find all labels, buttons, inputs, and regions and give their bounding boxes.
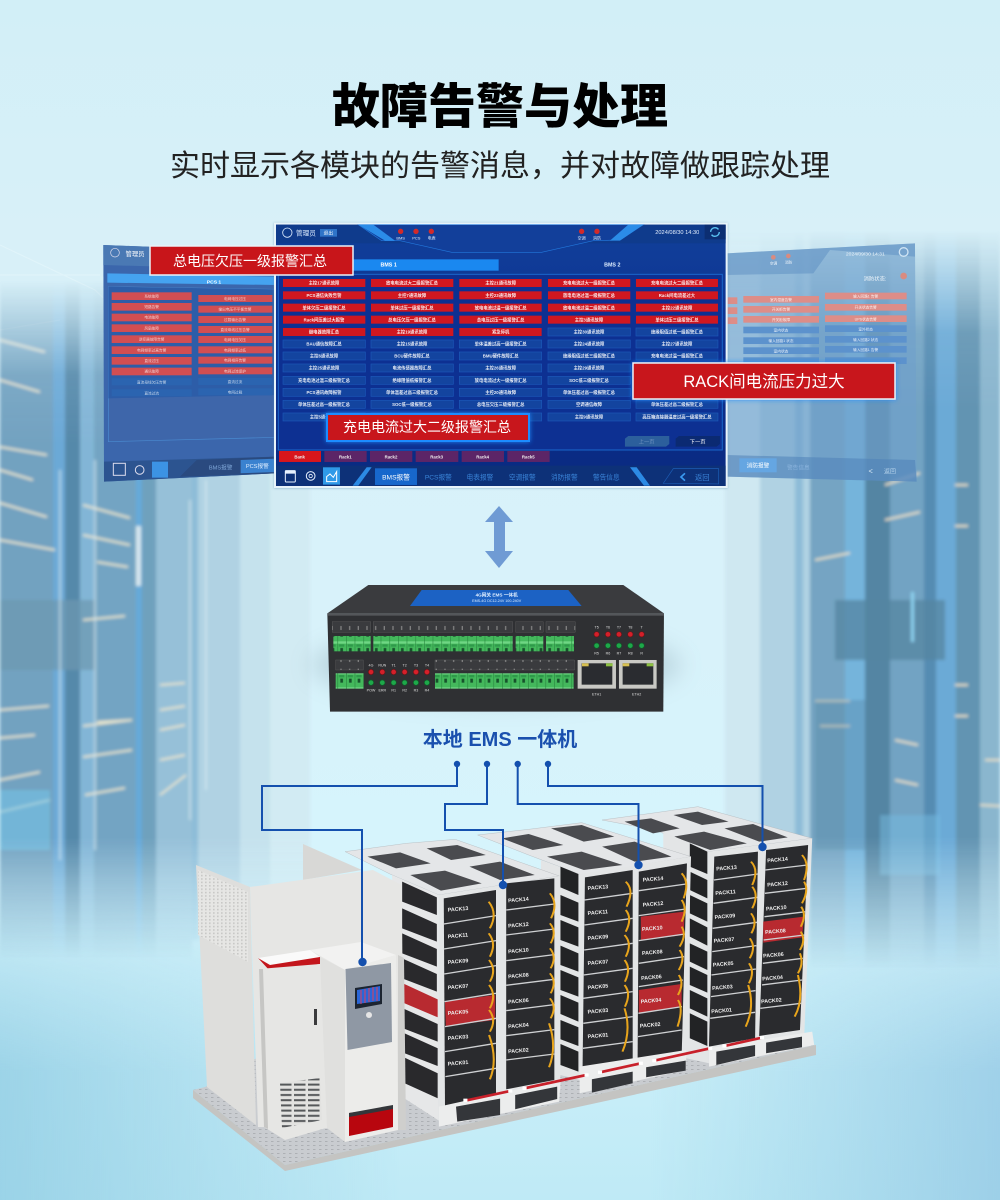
LED indicators: ERR [378,689,387,693]
rack group middle: PACK04 [640,998,662,1005]
panel: fire alarm screen (right, faded): 输入回路1 状态 [768,338,794,343]
alarm list cells: 充电电池过温一级报警汇总 [651,353,704,360]
alarm list cells: 单体压差过高一级报警汇总 [563,389,616,396]
rack group rear right: PACK03 [712,984,733,992]
alarm list cells: 总电压过压一级报警汇总 [477,316,525,323]
panel: PCS alarm screen (left, faded): 电网频率过低 [224,347,246,352]
LED indicators: T3 [414,663,418,667]
alarm list cells: 紧急停机 [492,329,510,336]
alarm list cells: BCU硬件故障汇总 [394,353,430,360]
rack group rear right: PACK13 [716,865,737,873]
panel: PCS alarm screen (left, faded): PCS报警 [246,462,269,470]
LED indicators: T [641,625,644,629]
panel: fire alarm screen (right, faded): 空调 [770,260,778,265]
panel: fire alarm screen (right, faded): 消防状态: [864,274,886,282]
rack group middle: PACK13 [587,884,609,892]
alarm list cells: 充电电流过大一级报警汇总 [563,280,616,287]
rear wall panels [196,844,404,1130]
cabinet: control unit with touch screen [310,942,406,1142]
LED indicators: T8 [628,625,632,629]
alarm list cells: 单体温差过高三级报警汇总 [386,389,439,396]
Ethernet ports [578,660,657,696]
alarm list cells: 单体过压三级报警汇总 [655,316,699,323]
alarm list cells: PCS通讯故障报警 [307,389,342,396]
rack group rear right: PACK04 [762,975,783,983]
panel: fire alarm screen (right, faded): 室内状态 [774,328,789,333]
base plate [193,1000,816,1171]
callout: rack current pressure too high [633,363,895,399]
alarm list cells: 主控30通讯故障 [574,329,605,336]
bottom navigation: 消防报警 [551,473,578,482]
alarm list cells: 主控29通讯故障 [574,365,605,372]
LED indicators: R [640,651,643,655]
alarm list cells: 主控15通讯故障 [397,341,428,348]
panel: PCS alarm screen (left, faded): 直流过流 [144,390,159,395]
panel: PCS alarm screen (left, faded): 短路告警 [144,304,159,309]
alarm list cells: 放电电池过温一级报警汇总 [563,292,616,299]
rack group front: PACK04 [508,1023,529,1030]
bottom navigation: BMS报警 [382,473,410,482]
rack group front: PACK13 [448,906,469,914]
screen header: BMS [396,235,405,240]
alarm list cells: 放电电流过大二级报警汇总 [386,280,439,287]
Ethernet ports: ETH1 [592,692,601,696]
alarm list cells: 放电电池过温一级报警汇总 [475,304,527,311]
callout: total voltage undervoltage: 总电压欠压一级报警汇总 [173,253,327,269]
Ethernet ports: ETH2 [632,692,641,696]
rack group rear right: PACK02 [761,998,782,1005]
rack group middle: PACK11 [587,909,608,917]
alarm list cells: 总电压欠压一级报警汇总 [388,316,436,323]
panel: PCS alarm screen (left, faded): 系统故障 [144,293,159,298]
rack group front: PACK01 [448,1060,469,1068]
device top label [410,590,582,606]
LED indicators: T4 [425,663,429,667]
rack tabs: Bank [294,454,306,459]
alarm list cells: 主控9通讯故障 [575,414,604,421]
rack tabs: Rack5 [522,454,535,459]
alarm list cells: 充电电池过温三级报警汇总 [298,377,351,384]
LED indicators: R1 [391,689,396,693]
screen header: 退出 [324,230,333,237]
device shadow [311,627,681,703]
alarm list cells: 充电电流过大二级报警汇总 [651,280,704,287]
alarm list cells: BMU硬件故障汇总 [483,353,519,360]
alarm list cells: 绝缘阻值低报警汇总 [393,377,432,384]
panel: fire alarm screen (right, faded): 返回 [884,468,896,475]
rack tabs: Rack4 [476,454,490,459]
alarm list cells: 主控21通讯故障 [485,280,517,287]
alarm list cells: SOC低一级报警汇总 [392,401,432,408]
panel: PCS alarm screen (left, faded): 电网过载 [228,389,243,394]
panel: PCS alarm screen (left, faded) [103,245,277,482]
LED indicators: T7 [617,625,621,629]
connection lines [262,761,767,966]
panel: PCS alarm screen (left, faded): 电网相序告警 [224,358,246,363]
scene: battery racks [345,807,814,1127]
panel: fire alarm screen (right, faded): 输入回路2 状态 [853,337,878,342]
rack group rear right: PACK10 [766,905,787,913]
LED indicators: T6 [606,625,610,629]
panel: BMS alarm screen (main) [274,223,728,488]
screen header: 2024/08/30 14:30 [655,230,699,236]
screen header: 电表 [428,234,436,240]
rack group rear right: PACK11 [715,889,736,897]
alarm list cells: 空调通信故障 [576,401,603,408]
rack group front: PACK02 [508,1048,529,1055]
alarm list cells: 高压箱连接器温度过高一级报警汇总 [642,414,712,421]
panel: PCS alarm screen (left, faded): 电网过流保护 [224,368,246,373]
alarm list cells: 主控24通讯故障 [574,341,605,348]
callout: total voltage undervoltage [150,246,353,275]
panel: fire alarm screen (right, faded): 输入回路1 告警 [853,347,878,352]
rack group rear right: PACK05 [713,961,734,969]
LED indicators: T5 [594,625,599,629]
panel: PCS alarm screen (left, faded): 逆变器故障告警 [139,336,165,341]
alarm list cells: 主控19通讯故障 [397,329,428,336]
BMS tabs: BMS 2 [604,263,620,269]
panel: fire alarm screen (right, faded): 消防 [785,259,793,264]
rack group front: PACK10 [508,948,529,955]
rack group front: PACK14 [508,897,529,904]
rack tabs: Rack3 [430,454,444,459]
panel: PCS alarm screen (left, faded): 直流过流 [228,379,243,384]
rack group rear right: PACK07 [714,937,735,945]
LED indicators: T1 [392,663,396,667]
rack group middle: PACK02 [640,1022,661,1030]
rack tabs: Rack2 [385,454,398,459]
device name label: 本地 EMS 一体机 [423,728,577,751]
alarm list cells: 单体温差过高一级报警汇总 [475,341,527,348]
alarm list cells: SOC低三级报警汇总 [569,377,609,384]
panel: fire alarm screen (right, faded): 开关状态告警 [855,305,877,310]
bottom navigation: 警告信息 [593,473,620,482]
rack group front: PACK11 [448,933,468,940]
panel: fire alarm screen (right, faded): 消防报警 [747,461,770,469]
pagination buttons [625,436,720,447]
panel: PCS alarm screen (left, faded): 过载输出告警 [224,317,246,322]
rack group rear right: PACK12 [767,881,788,889]
panel: fire alarm screen (right, faded): 警告信息 [787,463,810,471]
bottom navigation: PCS报警 [425,473,452,482]
LED indicators: R2 [402,689,407,693]
rack group rear right: PACK01 [711,1008,732,1015]
panel: fire alarm screen (right, faded): < [869,466,873,475]
rack group front: PACK05 [448,1009,469,1017]
screen header [276,225,726,252]
terminal blocks [333,636,574,689]
alarm list cells: Rack间电流差过大 [659,292,696,299]
LED indicators: T2 [403,663,407,667]
alarm list cells: 单体压差过高二级报警汇总 [651,401,704,408]
panel: fire alarm screen (right, faded): 开关柜故障 [772,317,790,322]
panel: PCS alarm screen (left, faded): 直流过压 [144,358,159,363]
rack group middle: PACK09 [587,934,609,942]
alarm list cells: 继电器故障汇总 [309,329,340,336]
alarm list cells: 主控6通讯故障 [310,353,339,360]
rack group middle: PACK12 [643,901,664,909]
LED indicators: RUN [378,663,387,667]
alarm list cells: 主控25通讯故障 [309,365,340,372]
pagination buttons: 上一页 [639,437,655,445]
callout: rack current pressure too high: RACK间电流压力过大 [683,372,845,391]
alarm list cells: 主控26通讯故障 [485,365,517,372]
panel: fire alarm screen (right, faded): 开关柜告警 [772,307,790,312]
panel: PCS alarm screen (left, faded): 风扇故障 [144,325,159,330]
panel: PCS alarm screen (left, faded): PCS 1 [207,279,221,285]
alarm list cells: 单体欠压二级报警汇总 [302,304,346,311]
rack group rear right: PACK06 [763,952,784,960]
rack tabs: Rack1 [339,454,352,459]
alarm list cells: 放电电流过大一级报警汇总 [475,377,527,384]
LED indicators: R5 [594,651,599,655]
screen header: 空调 [578,234,586,240]
busbars [463,1036,764,1102]
LED indicators: R7 [617,651,621,655]
rack group rear right: PACK14 [767,857,788,864]
panel: fire alarm screen (right, faded): 输入回路1 告警 [853,294,878,299]
panel: PCS alarm screen (left, faded): 电网频率过高告警 [137,347,167,352]
alarm list cells: 主控17通讯故障 [309,280,340,287]
rack group middle: PACK14 [643,876,664,884]
rack group front: PACK09 [448,958,469,966]
panel: PCS alarm screen (left, faded): 管理员 [126,249,144,258]
panel: PCS alarm screen (left, faded): 电网电压过压 [224,296,246,301]
callout: charge current too high [327,414,529,441]
rack group rear right [602,807,814,1067]
alarm list cells: BAU通信故障汇总 [306,341,342,348]
screen header: PCS [412,235,421,240]
alarm list cells: 主控5通讯故障 [310,414,339,421]
alarm list cells: 主控7通讯故障 [398,292,427,299]
LED indicators: R8 [628,651,633,655]
alarm list cells: 绝缘阻值过低一级报警汇总 [651,329,704,336]
pagination buttons: 下一页 [690,438,706,445]
screen header: 消防 [593,234,601,240]
panel: PCS alarm screen (left, faded): 电池故障 [144,315,159,320]
LED indicators: R3 [414,689,418,693]
LED indicators: 4G [369,663,374,667]
alarm list cells: 主控27通讯故障 [662,341,693,348]
rack group front: PACK03 [448,1034,469,1042]
alarm list cells: 单体压差过高一级报警汇总 [298,401,351,408]
alarm list cells: 主控20通讯故障 [485,389,517,396]
cabinet: left with red band [258,950,326,1140]
rack group middle: PACK08 [642,949,663,957]
title: 故障告警与处理 [332,81,668,134]
panel: fire alarm screen (right, faded) [727,243,917,482]
bottom navigation: 电表报警 [467,473,494,482]
device: local EMS unit [327,585,664,712]
rack group middle: PACK07 [587,959,609,967]
panel: fire alarm screen (right, faded): 室外状态 [858,326,873,331]
panel: PCS alarm screen (left, faded): 电网电压欠压 [224,337,246,342]
rack group rear right: PACK08 [765,928,786,936]
bottom navigation [276,466,726,486]
alarm list cells: 单体过压一级报警汇总 [390,304,434,311]
rack group middle: PACK06 [641,974,662,982]
LED indicators: R6 [606,651,610,655]
rack group middle: PACK10 [642,925,663,933]
alarm list cells [283,279,718,421]
callout: charge current too high: 充电电流过大二级报警汇总 [343,419,511,435]
alarm list cells: Rack间压差过大报警 [304,316,345,323]
panel: PCS alarm screen (left, faded): BMS报警 [209,463,233,471]
arrow: bidirectional [485,506,513,568]
rack group middle: PACK05 [587,984,609,991]
rack group front: PACK07 [448,984,469,991]
bottom navigation: 返回 [695,473,710,482]
BMS tabs: BMS 1 [381,263,397,269]
panel: PCS alarm screen (left, faded): 输出电压不平衡告警 [219,307,252,312]
rack group front: PACK06 [508,998,529,1006]
alarm list cells: 放电电池过温二级报警汇总 [563,304,616,311]
rack group rear right: PACK09 [714,913,735,921]
BMS tabs [352,259,620,271]
rack tabs [279,451,550,462]
alarm list cells: 主控22通讯故障 [662,304,693,311]
panel: fire alarm screen (right, faded): 2024/09/30 14:31 [846,251,885,257]
panel: fire alarm screen (right, faded): 室内湿度告警 [770,297,792,302]
LED indicators [367,625,644,693]
alarm list cells: 总电压欠压三级报警汇总 [477,401,525,408]
alarm list cells: 电池传感器故障汇总 [393,365,432,372]
LED indicators: POW [367,689,376,693]
panel: fire alarm screen (right, faded): 室内状态 [774,348,789,353]
rack group front [345,839,560,1127]
LED indicators: R4 [425,689,429,693]
alarm list cells: PCS通信失败告警 [307,292,342,299]
rack group front: PACK08 [508,973,529,980]
device top label: EMS-4G DC12-24V 100-240V [472,599,522,603]
rack group front: PACK12 [508,922,529,930]
rack group middle: PACK01 [587,1033,609,1040]
alarm list cells: 主控3通讯故障 [575,316,604,323]
rack group middle [478,823,691,1093]
panel: fire alarm screen (right, faded): UPS状态告警 [855,316,877,321]
rack group middle: PACK03 [587,1008,609,1016]
panel: PCS alarm screen (left, faded): 直流母线过压告警 [220,327,250,332]
screen header: 管理员 [296,229,316,238]
subtitle: 实时显示各模块的告警消息，并对故障做跟踪处理 [170,150,830,183]
panel: PCS alarm screen (left, faded): 直流母线欠压告警 [137,379,167,384]
device top label: 4G网关 EMS 一体机 [476,592,518,599]
alarm list cells: 主控23通讯故障 [485,292,517,299]
panel: PCS alarm screen (left, faded): 通讯故障 [144,369,159,374]
bottom navigation: 空调报警 [509,473,536,482]
alarm list cells: 绝缘阻值过低三级报警汇总 [563,353,616,360]
